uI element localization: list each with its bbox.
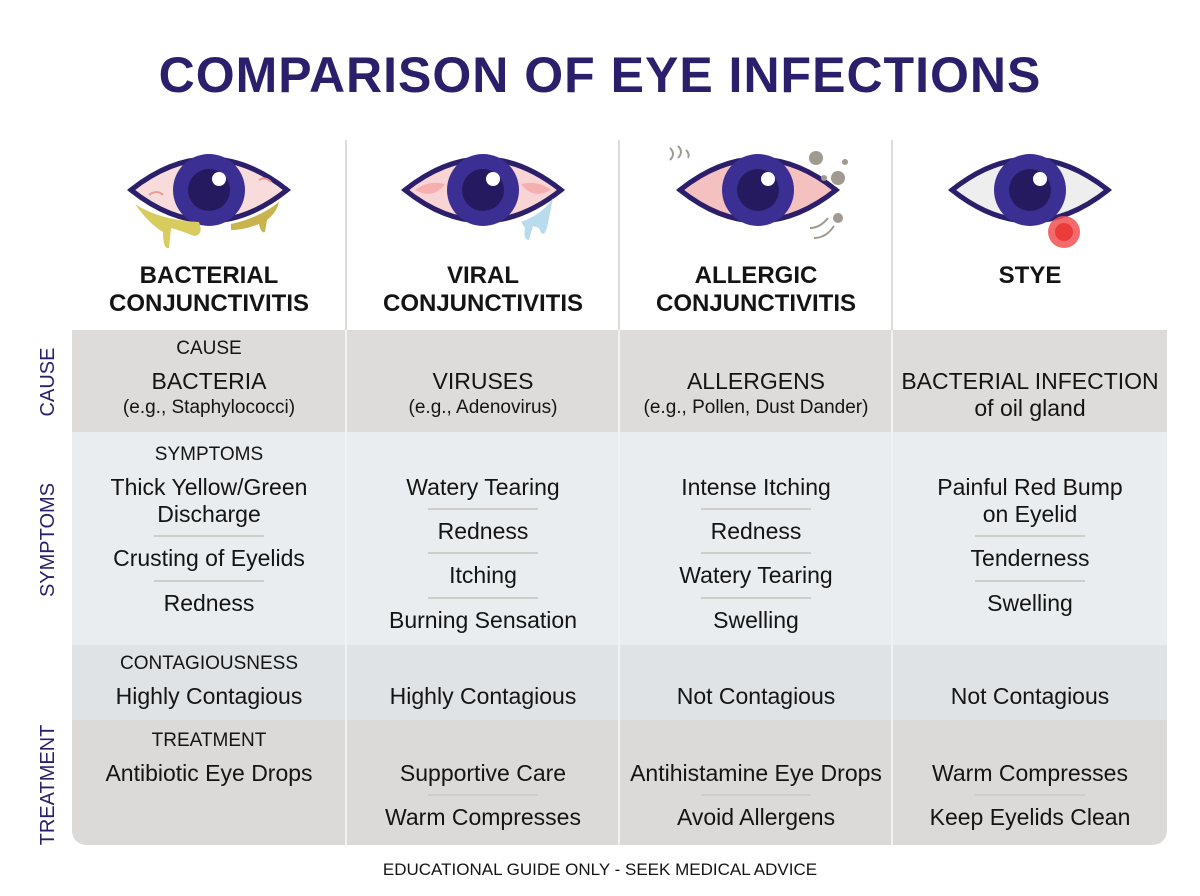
text: Antibiotic Eye Drops: [105, 760, 313, 786]
text: Redness: [711, 518, 801, 544]
footer: EDUCATIONAL GUIDE ONLY - SEEK MEDICAL ADVICE: [383, 860, 817, 879]
text: Not Contagious: [951, 683, 1109, 709]
table background: [72, 330, 1167, 845]
text: TREATMENT: [152, 730, 266, 751]
text: Highly Contagious: [390, 683, 576, 709]
text: VIRAL: [447, 262, 519, 289]
text: of oil gland: [974, 395, 1086, 421]
text: Crusting of Eyelids: [113, 545, 305, 571]
text: (e.g., Staphylococci): [123, 397, 295, 418]
text: Not Contagious: [677, 683, 835, 709]
title: COMPARISON OF EYE INFECTIONS: [159, 47, 1041, 103]
text: Watery Tearing: [679, 562, 833, 588]
text: Watery Tearing: [406, 474, 560, 500]
text: Discharge: [157, 501, 261, 527]
text: Painful Red Bump: [937, 474, 1123, 500]
text: CAUSE: [176, 338, 242, 359]
icon: bacterial eye: [127, 154, 291, 248]
icon: viral eye: [401, 154, 565, 240]
text: ALLERGENS: [687, 368, 825, 394]
text: SYMPTOMS: [155, 444, 263, 465]
text: Thick Yellow/Green: [111, 474, 307, 500]
text: CONJUNCTIVITIS: [383, 290, 583, 317]
text: (e.g., Adenovirus): [409, 397, 557, 418]
treatment row: [105, 730, 1130, 830]
text: TREATMENT: [37, 725, 59, 845]
text: CONJUNCTIVITIS: [109, 290, 309, 317]
text: BACTERIAL: [140, 262, 278, 289]
text: ALLERGIC: [695, 262, 817, 289]
text: Antihistamine Eye Drops: [630, 760, 882, 786]
text: Swelling: [713, 607, 799, 633]
column headers: [109, 262, 1061, 317]
text: Tenderness: [971, 545, 1089, 571]
text: Itching: [449, 562, 517, 588]
text: VIRUSES: [432, 368, 533, 394]
text: CONJUNCTIVITIS: [656, 290, 856, 317]
text: Keep Eyelids Clean: [930, 804, 1130, 830]
text: Redness: [164, 590, 254, 616]
text: Intense Itching: [681, 474, 831, 500]
row labels: [37, 348, 59, 845]
icon: stye eye: [948, 154, 1112, 248]
text: BACTERIA: [151, 368, 267, 394]
text: STYE: [999, 262, 1061, 289]
text: SYMPTOMS: [37, 483, 59, 597]
symptoms row: [111, 444, 1123, 633]
text: Supportive Care: [400, 760, 566, 786]
text: Swelling: [987, 590, 1073, 616]
text: Avoid Allergens: [677, 804, 835, 830]
text: CAUSE: [37, 348, 59, 416]
text: Redness: [438, 518, 528, 544]
text: Warm Compresses: [932, 760, 1128, 786]
icon: allergic eye: [669, 145, 848, 239]
text: Highly Contagious: [116, 683, 302, 709]
text: on Eyelid: [983, 501, 1077, 527]
text: (e.g., Pollen, Dust Dander): [644, 397, 868, 418]
text: CONTAGIOUSNESS: [120, 653, 298, 674]
text: BACTERIAL INFECTION: [901, 368, 1159, 394]
cause row: [123, 338, 1159, 421]
text: Warm Compresses: [385, 804, 581, 830]
contagiousness row: [116, 653, 1109, 709]
text: Burning Sensation: [389, 607, 577, 633]
